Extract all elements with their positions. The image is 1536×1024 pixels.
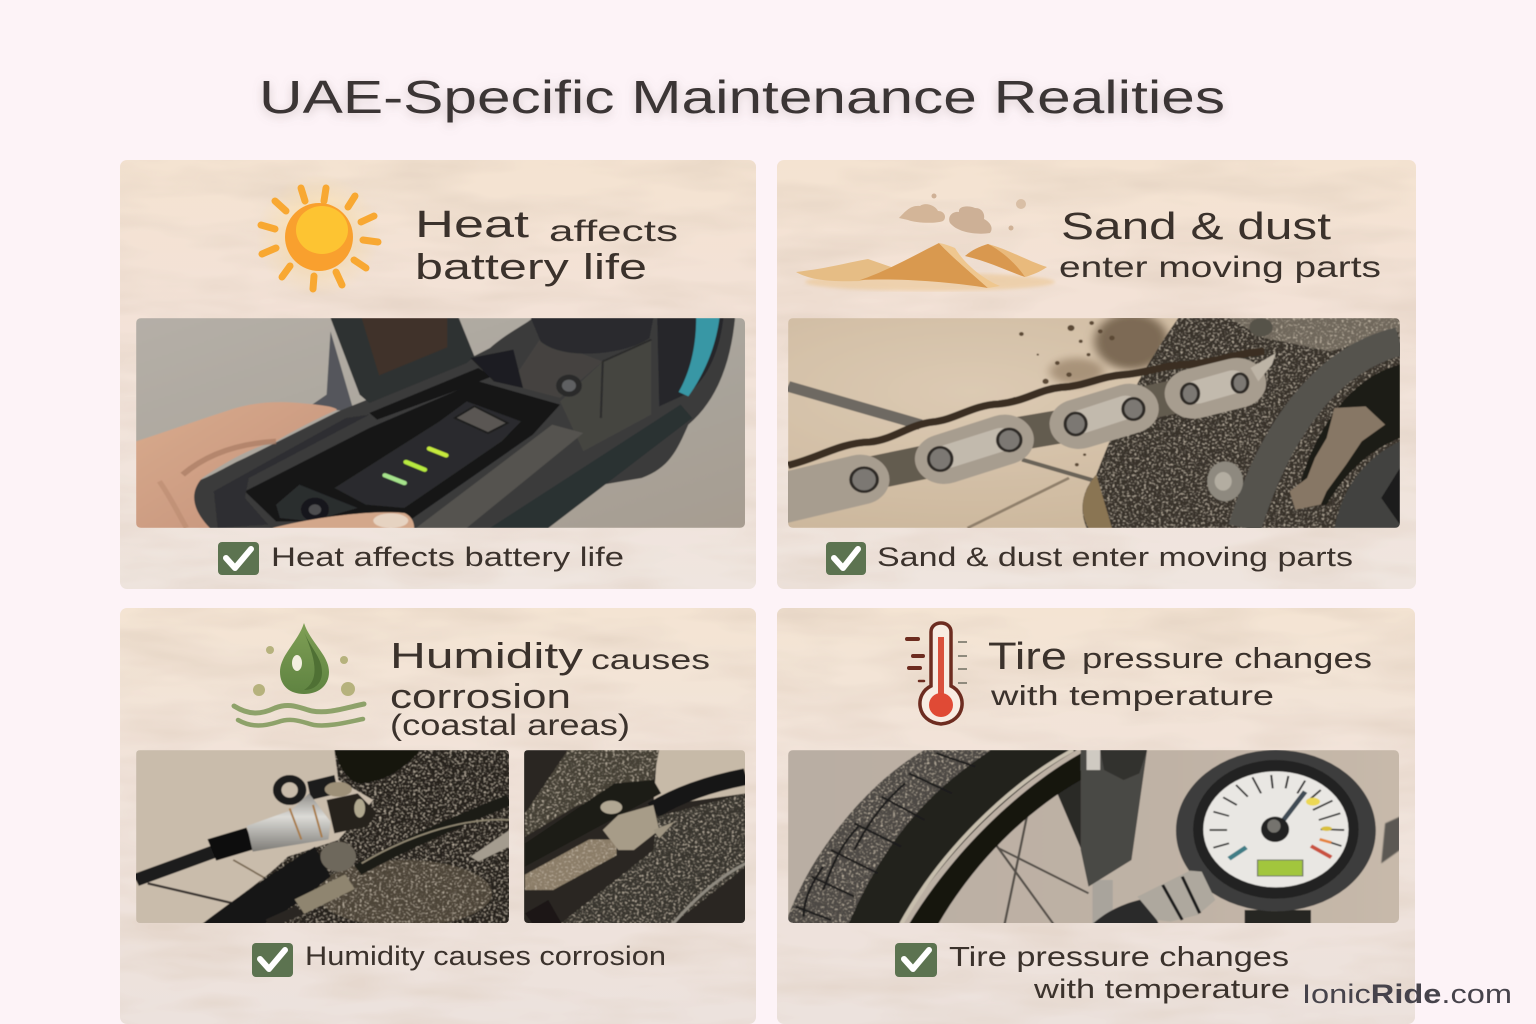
photo: battery compartment — [136, 318, 746, 528]
icon: dunes and dust clouds — [796, 194, 1055, 291]
heading: heat: affects — [549, 215, 678, 248]
checkbox — [218, 542, 259, 575]
panel: heat — [120, 160, 756, 589]
caption: sand and dust: Sand & dust enter moving parts — [877, 542, 1353, 572]
icon: water drop and waves — [234, 623, 364, 726]
panel: humidity — [120, 608, 756, 1024]
heading: sand and dust — [1059, 206, 1381, 284]
heading: sand and dust: Sand & dust — [1061, 206, 1332, 248]
heading: tire pressure: with temperature — [990, 680, 1274, 711]
checkbox — [895, 943, 937, 977]
photo: tire and pressure gauge — [788, 750, 1400, 924]
checkbox — [252, 943, 293, 977]
photo: sandy chain — [776, 313, 1400, 528]
caption: tire pressure — [949, 941, 1290, 1004]
heading: tire pressure: Tire — [988, 636, 1067, 678]
heading: sand and dust: enter moving parts — [1059, 251, 1381, 284]
heading: heat: Heat — [415, 204, 530, 246]
heading: tire pressure — [988, 636, 1372, 711]
icon: sun — [256, 174, 380, 298]
caption: heat: Heat affects battery life — [271, 542, 624, 572]
watermark: IonicRide.com: Ionic Ride .com — [1302, 979, 1512, 1009]
caption: humidity: Humidity causes corrosion — [305, 941, 666, 971]
checkbox — [826, 542, 866, 575]
heading: humidity — [390, 635, 710, 742]
panel: sand and dust — [776, 160, 1416, 589]
photo: corroded cable right — [524, 750, 746, 924]
caption: tire pressure: with temperature — [1033, 974, 1290, 1004]
panel: tire pressure — [777, 608, 1415, 1024]
heading: heat: battery life — [415, 246, 647, 287]
title: UAE-Specific Maintenance Realities — [259, 71, 1225, 123]
photo: corroded cable left — [136, 750, 509, 927]
tread cracks — [796, 753, 975, 920]
heading: humidity: Humidity — [390, 635, 583, 676]
caption: tire pressure: Tire pressure changes — [949, 941, 1289, 972]
heading: heat — [415, 204, 678, 287]
heading: humidity: causes — [591, 644, 710, 675]
heading: humidity: (coastal areas) — [390, 709, 630, 742]
heading: humidity: corrosion — [390, 678, 571, 716]
icon: thermometer — [907, 623, 967, 724]
heading: tire pressure: pressure changes — [1082, 643, 1372, 675]
